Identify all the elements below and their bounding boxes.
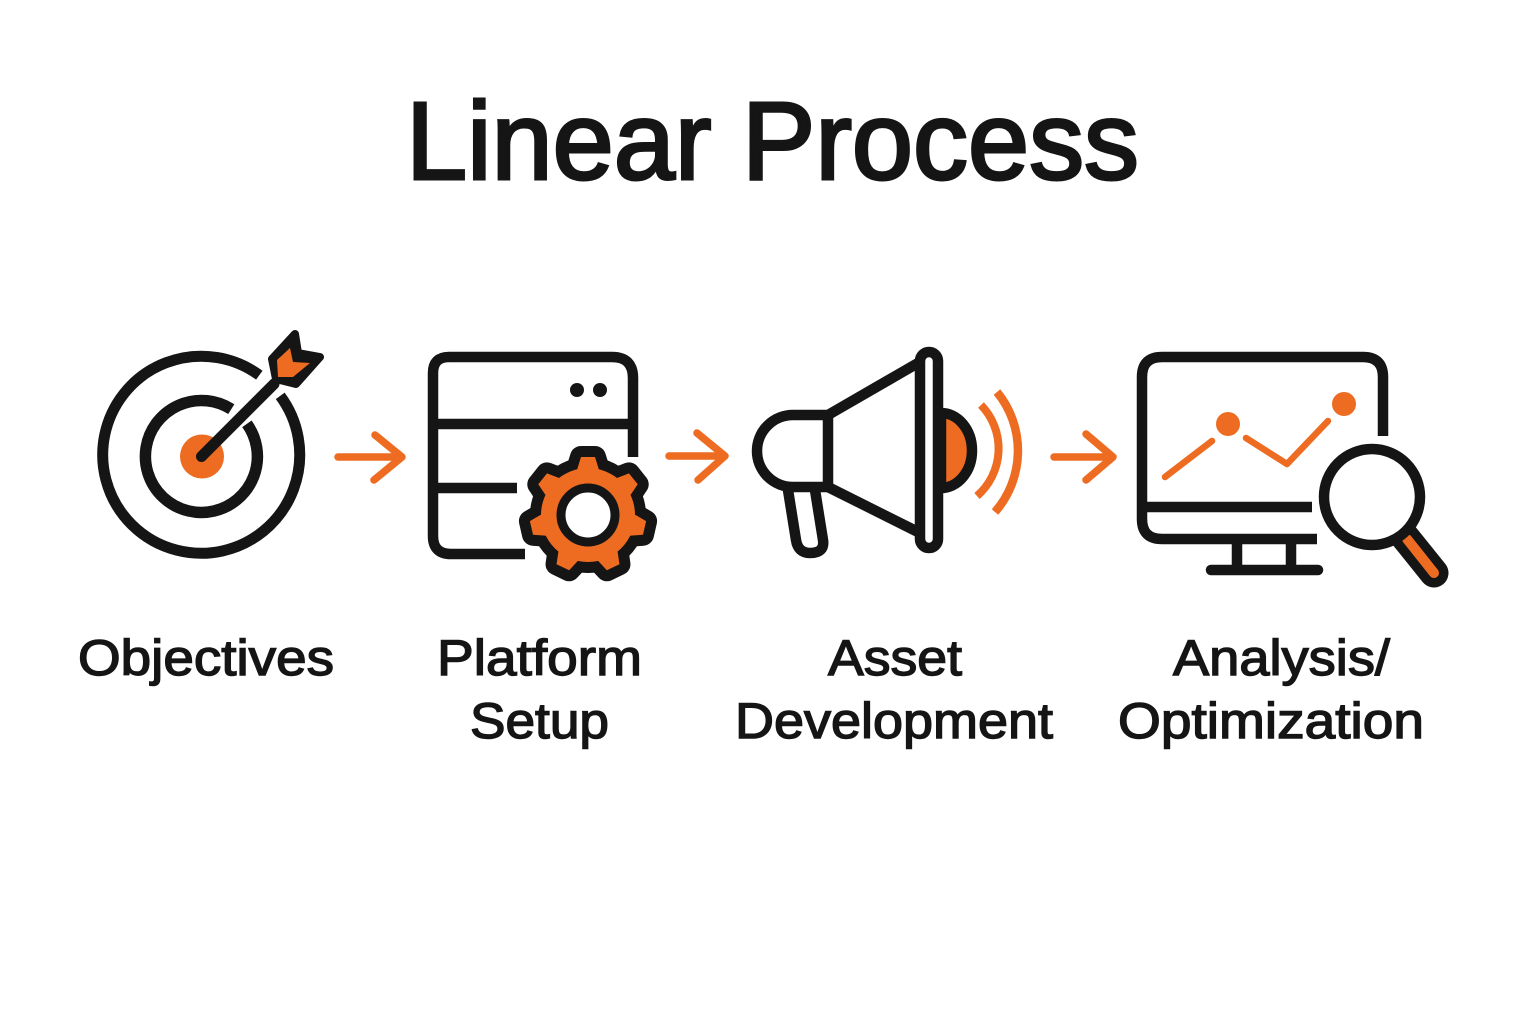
step 4: analysis / optimization — [1118, 357, 1434, 749]
label: asset development: Development — [735, 693, 1053, 749]
label: platform setup: Setup — [470, 693, 609, 749]
label: objectives: Objectives — [78, 630, 334, 686]
step 2: platform setup — [433, 357, 647, 749]
title: Linear Process — [406, 80, 1139, 203]
label: asset development: Asset — [828, 630, 962, 686]
label: platform setup — [437, 630, 642, 749]
label: analysis / optimization — [1118, 630, 1424, 749]
label: platform setup: Platform — [437, 630, 642, 686]
icon: browser window with gear — [433, 357, 647, 572]
icon: target with arrow — [103, 334, 320, 553]
arrow 2 — [669, 433, 725, 480]
arrow 3 — [1054, 434, 1113, 480]
step 3: asset development — [735, 352, 1053, 749]
arrow 1 — [338, 435, 402, 480]
label: asset development — [735, 630, 1053, 749]
icon: megaphone with sound waves — [757, 352, 1018, 553]
label: analysis / optimization: Analysis/ — [1173, 630, 1390, 686]
label: analysis / optimization: Optimization — [1118, 693, 1424, 749]
step 1: objectives — [78, 334, 334, 686]
icon: monitor with chart and magnifier — [1142, 357, 1434, 573]
